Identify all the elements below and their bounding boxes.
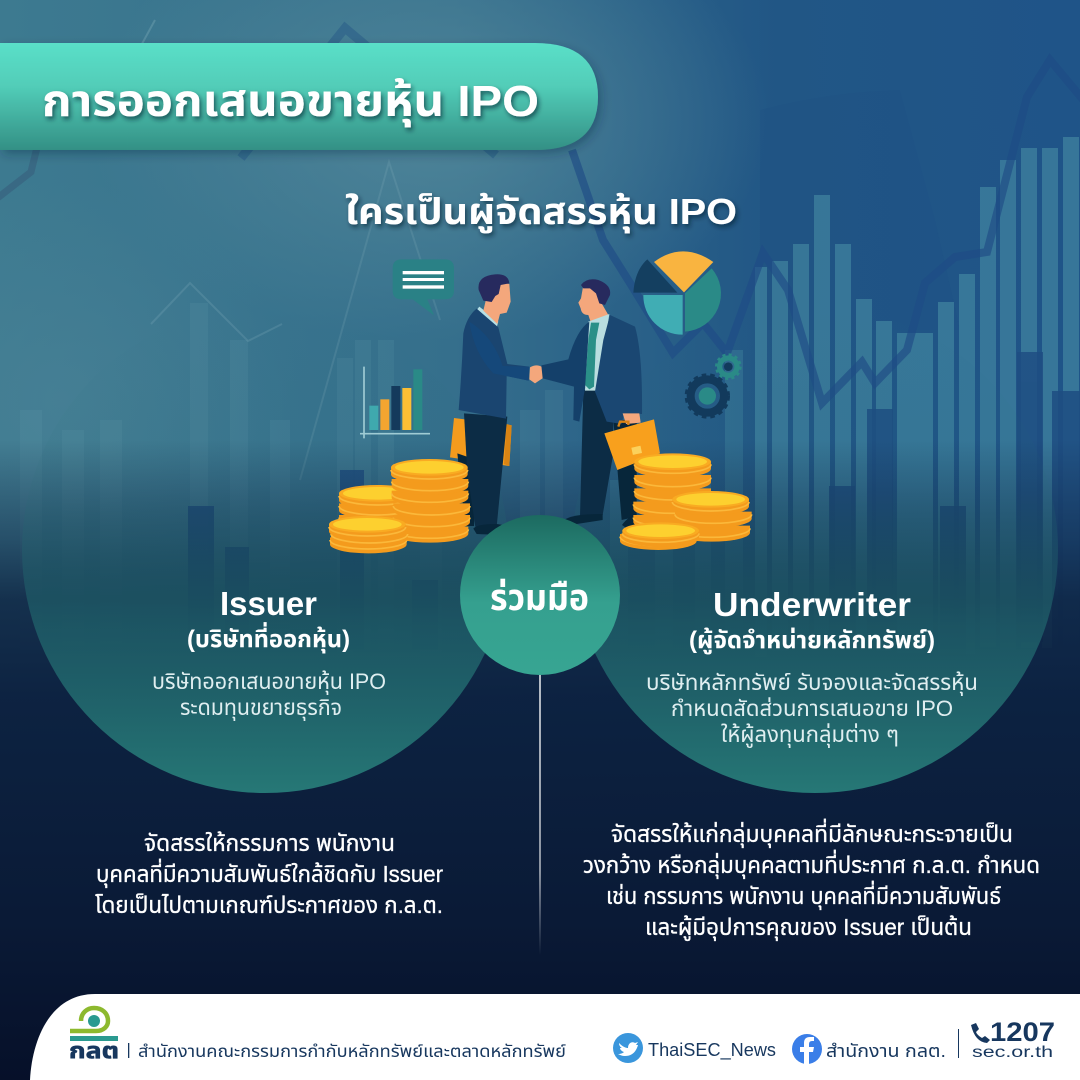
- badge: joint circle: ร่วมมือ: [490, 577, 589, 618]
- badge: joint circle: [460, 515, 620, 675]
- issuer allocation text: จัดสรรให้กรรมการ พนักงาน: [144, 830, 395, 856]
- title banner: การออกเสนอขายหุ้น IPO: [42, 77, 539, 128]
- issuer text: Issuer: [220, 585, 317, 622]
- underwriter text: (ผู้จัดจำหน่ายหลักทรัพย์): [689, 626, 935, 655]
- icon: gears: [687, 355, 740, 416]
- underwriter text: บริษัทหลักทรัพย์ รับจองและจัดสรรหุ้น: [646, 670, 978, 696]
- icon: twitter: [613, 1033, 643, 1063]
- issuer text: ระดมทุนขยายธุรกิจ: [180, 695, 342, 721]
- underwriter allocation text: เช่น กรรมการ พนักงาน บุคคลที่มีความสัมพันธ์: [606, 880, 1001, 910]
- issuer text: (บริษัทที่ออกหุ้น): [187, 622, 350, 654]
- underwriter text: กำหนดสัดส่วนการเสนอขาย IPO: [671, 696, 953, 721]
- subtitle: ใครเป็นผู้จัดสรรหุ้น IPO: [345, 191, 737, 233]
- panel: issuer circle: [22, 307, 508, 793]
- underwriter allocation text: วงกว้าง หรือกลุ่มบุคคลตามที่ประกาศ ก.ล.ต. กำหนด: [583, 849, 1040, 879]
- hotline: 1207: [990, 1017, 1055, 1047]
- issuer text: บริษัทออกเสนอขายหุ้น IPO: [152, 669, 386, 695]
- underwriter allocation text: และผู้มีอุปการคุณของ Issuer เป็นต้น: [645, 914, 972, 942]
- figure: right businessman: [541, 279, 660, 529]
- footer: [30, 994, 1080, 1080]
- issuer text: [152, 585, 386, 721]
- underwriter text: ให้ผู้ลงทุนกลุ่มต่าง ๆ: [721, 722, 899, 748]
- underwriter allocation text: [583, 818, 1040, 942]
- icon: phone: [971, 1023, 990, 1043]
- underwriter text: Underwriter: [713, 586, 911, 623]
- issuer allocation text: โดยเป็นไปตามเกณฑ์ประกาศของ ก.ล.ต.: [95, 892, 443, 918]
- icon: coin stacks: [329, 453, 752, 553]
- figure: left businessman: [457, 274, 544, 534]
- organisation name: สำนักงานคณะกรรมการกำกับหลักทรัพย์และตลาดหลักทรัพย์: [138, 1042, 566, 1061]
- issuer allocation text: [95, 830, 443, 918]
- icon: facebook: [792, 1034, 822, 1064]
- title banner: [0, 43, 598, 150]
- logo: กลต: [69, 1038, 119, 1063]
- issuer allocation text: บุคคลที่มีความสัมพันธ์ใกล้ชิดกับ Issuer: [96, 858, 443, 888]
- twitter handle: ThaiSEC_News: [648, 1040, 776, 1061]
- underwriter text: [646, 586, 978, 748]
- icon: bar chart: [360, 367, 430, 438]
- left briefcase: [450, 418, 512, 466]
- logo: [69, 1008, 119, 1063]
- connector line: [539, 675, 541, 955]
- panel: underwriter circle: [572, 307, 1058, 793]
- icon: pie chart: [633, 251, 721, 335]
- facebook name: สำนักงาน กลต.: [826, 1041, 946, 1061]
- icon: speech bubble: [393, 259, 454, 315]
- illustration: handshake and coins: [329, 251, 752, 553]
- underwriter allocation text: จัดสรรให้แก่กลุ่มบุคคลที่มีลักษณะกระจายเป็น: [611, 818, 1013, 848]
- website: sec.or.th: [972, 1044, 1053, 1061]
